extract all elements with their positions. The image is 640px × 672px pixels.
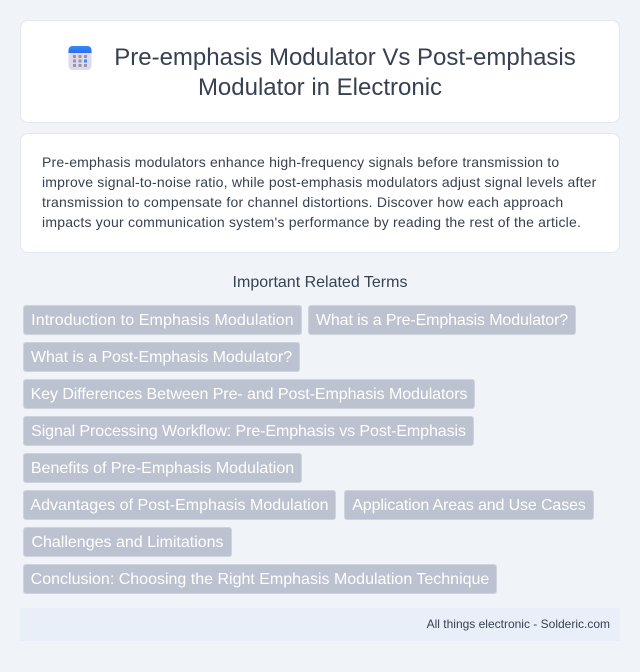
text block: intro: improve signal-to-noise ratio, while post-emphasis modulators adjust signal levels after	[42, 174, 597, 190]
tag: pre-emphasis: What is a Pre-Emphasis Modulator?	[316, 312, 568, 329]
heading: related terms: Important Related Terms	[233, 274, 407, 291]
footer credit: All things electronic - Solderic.com	[427, 617, 610, 631]
tag: workflow: Signal Processing Workflow: Pre-Emphasis vs Post-Emphasis	[31, 423, 466, 440]
tag: challenges: Challenges and Limitations	[31, 534, 224, 551]
text block: intro: Pre-emphasis modulators enhance high-frequency signals before transmission to	[42, 154, 559, 170]
tag: pre-emphasis	[308, 305, 576, 335]
icon: calendar	[68, 46, 92, 70]
tag: advantages	[23, 490, 336, 520]
footer	[20, 608, 620, 641]
tag: post-emphasis: What is a Post-Emphasis Modulator?	[31, 349, 292, 366]
tag: applications	[344, 490, 594, 520]
title	[114, 44, 576, 101]
text block: intro: impacts your communication system's performance by reading the rest of the article.	[42, 214, 581, 230]
tag: workflow	[23, 416, 474, 446]
title: Modulator in Electronic	[198, 74, 442, 101]
tag: conclusion	[23, 564, 497, 594]
tag: key differences: Key Differences Between Pre- and Post-Emphasis Modulators	[31, 386, 467, 403]
panel: title card	[20, 20, 620, 123]
title: Pre-emphasis Modulator Vs Post-emphasis	[114, 44, 576, 71]
panel: intro text	[20, 133, 620, 253]
text block: intro	[42, 154, 597, 230]
tag: introduction: Introduction to Emphasis Modulation	[31, 312, 294, 329]
text block: intro: transmission to compensate for channel distortions. Discover how each approach	[42, 194, 563, 210]
tag list	[23, 305, 594, 594]
tag: benefits	[23, 453, 302, 483]
tag: applications: Application Areas and Use Cases	[352, 497, 586, 514]
tag: post-emphasis	[23, 342, 300, 372]
tag: introduction	[23, 305, 302, 335]
tag: advantages: Advantages of Post-Emphasis Modulation	[30, 497, 329, 514]
tag: challenges	[23, 527, 232, 557]
tag: key differences	[23, 379, 475, 409]
tag: benefits: Benefits of Pre-Emphasis Modulation	[31, 460, 294, 477]
tag: conclusion: Conclusion: Choosing the Right Emphasis Modulation Technique	[31, 571, 489, 588]
